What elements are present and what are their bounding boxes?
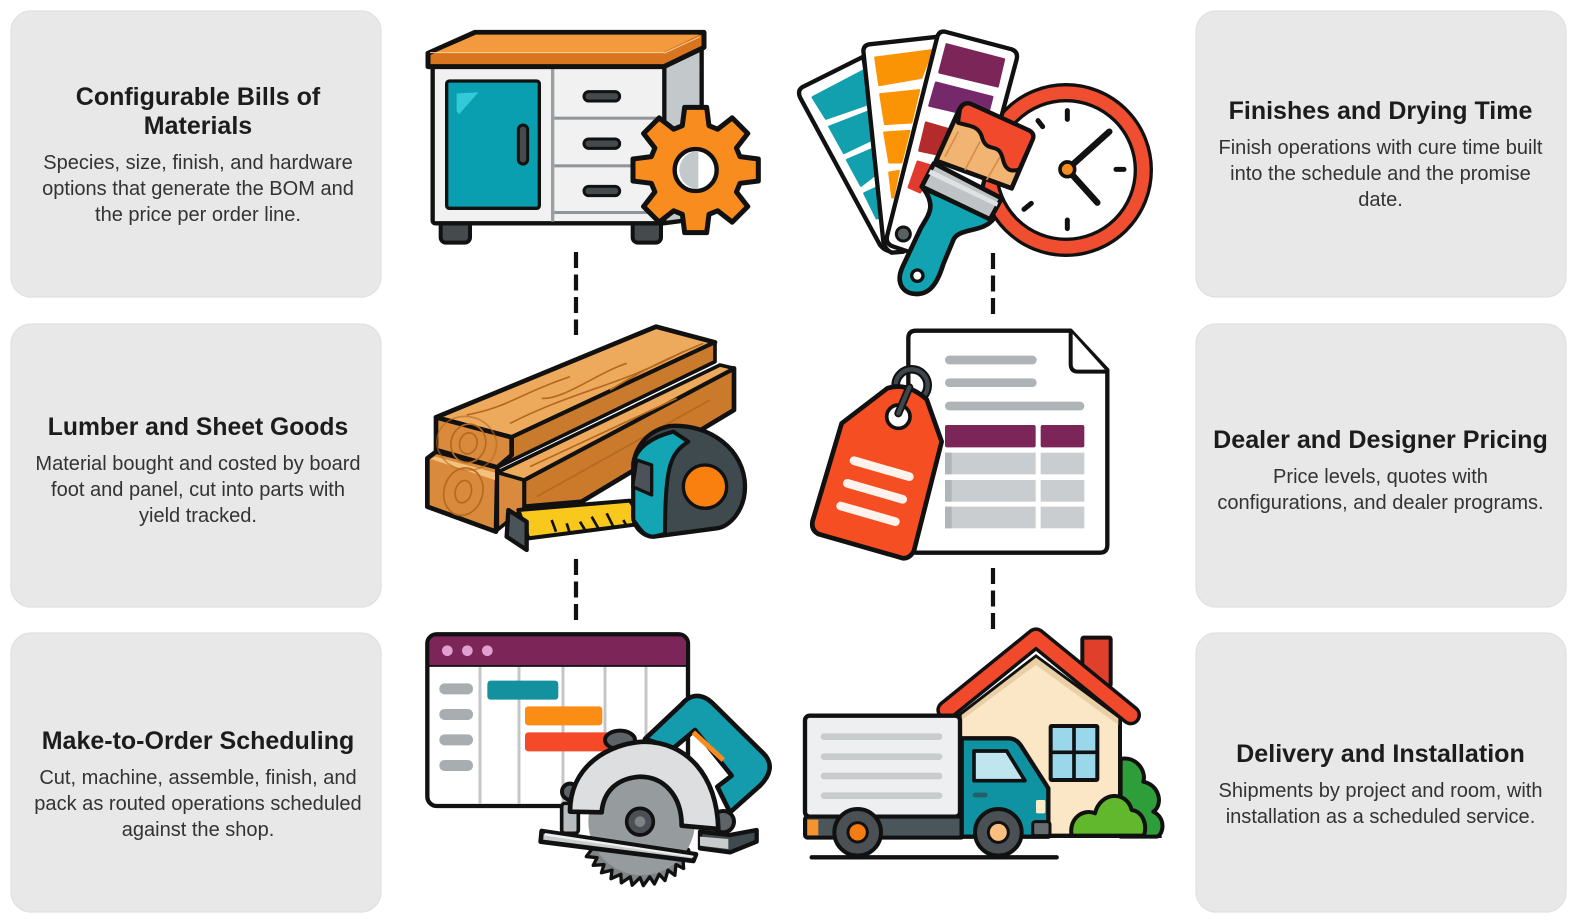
text: finishes description: into the schedule and the promise <box>1230 163 1531 185</box>
panel: Delivery and Installation <box>1196 633 1566 912</box>
connector: finishes to pricing <box>991 253 995 315</box>
lumber boards <box>427 327 734 532</box>
heading: Configurable Bills of Materials: Configurable Bills of <box>76 83 321 111</box>
icon: price tag and price sheet <box>812 331 1107 558</box>
text: finishes description: date. <box>1358 189 1403 211</box>
teal swatch card <box>799 57 893 252</box>
icon: delivery truck and house <box>805 638 1162 857</box>
heading: Dealer and Designer Pricing: Dealer and Designer Pricing <box>1213 426 1548 454</box>
text: configurable bills description: the price per order line. <box>95 204 301 226</box>
text: scheduling description: pack as routed operations scheduled <box>34 793 362 815</box>
text: delivery description: Shipments by project and room, with <box>1218 780 1542 802</box>
text: delivery description: installation as a scheduled service. <box>1226 806 1535 828</box>
icon: colour swatches, paint brush and clock <box>799 32 1143 294</box>
icon: schedule window and circular saw <box>427 634 770 886</box>
text: configurable bills description: Species, size, finish, and hardware <box>43 152 353 174</box>
truck <box>805 716 1057 857</box>
icon: gear <box>633 107 758 233</box>
text: scheduling description: against the shop. <box>122 819 274 841</box>
heading: Finishes and Drying Time: Finishes and Drying Time <box>1229 97 1532 125</box>
text: delivery description <box>1218 780 1542 828</box>
panel: Dealer and Designer Pricing <box>1196 324 1566 607</box>
text: finishes description <box>1219 137 1543 211</box>
text: pricing description <box>1217 466 1544 514</box>
text: configurable bills description: options that generate the BOM and <box>42 178 354 200</box>
text: pricing description: configurations, and dealer programs. <box>1217 492 1544 514</box>
icon: lumber boards and tape measure <box>427 327 745 550</box>
text: lumber description: foot and panel, cut into parts with <box>51 479 345 501</box>
connector: cabinet to lumber <box>574 252 578 335</box>
heading: Configurable Bills of Materials <box>76 83 321 140</box>
heading: Configurable Bills of Materials: Materials <box>144 112 252 140</box>
heading: Make-to-Order Scheduling: Make-to-Order Scheduling <box>42 727 354 755</box>
text: lumber description <box>35 453 361 527</box>
circular saw <box>541 696 770 886</box>
paint brush <box>900 103 1033 294</box>
house <box>947 638 1162 837</box>
text: scheduling description <box>34 767 362 841</box>
connector: pricing to delivery <box>991 568 995 630</box>
price sheet <box>908 331 1107 553</box>
purple swatch card <box>887 32 1017 253</box>
text: scheduling description: Cut, machine, assemble, finish, and <box>39 767 357 789</box>
text: lumber description: Material bought and costed by board <box>35 453 361 475</box>
panel: Lumber and Sheet Goods <box>11 324 381 607</box>
text: configurable bills description <box>42 152 354 226</box>
text: pricing description: Price levels, quotes with <box>1273 466 1488 488</box>
text: lumber description: yield tracked. <box>139 505 257 527</box>
panel: Finishes and Drying Time <box>1196 11 1566 297</box>
icon: cabinet with gear <box>428 32 758 243</box>
panel: Make-to-Order Scheduling <box>11 633 381 912</box>
clock <box>989 93 1143 247</box>
connector: lumber to schedule <box>574 559 578 621</box>
heading: Delivery and Installation: Delivery and Installation <box>1236 740 1525 768</box>
schedule window <box>427 634 688 806</box>
text: finishes description: Finish operations with cure time built <box>1219 137 1543 159</box>
tape measure <box>507 426 745 550</box>
orange swatch card <box>863 37 938 253</box>
panel: Configurable Bills of Materials <box>11 11 381 297</box>
price tag <box>812 369 942 558</box>
heading: Lumber and Sheet Goods: Lumber and Sheet Goods <box>48 414 348 441</box>
